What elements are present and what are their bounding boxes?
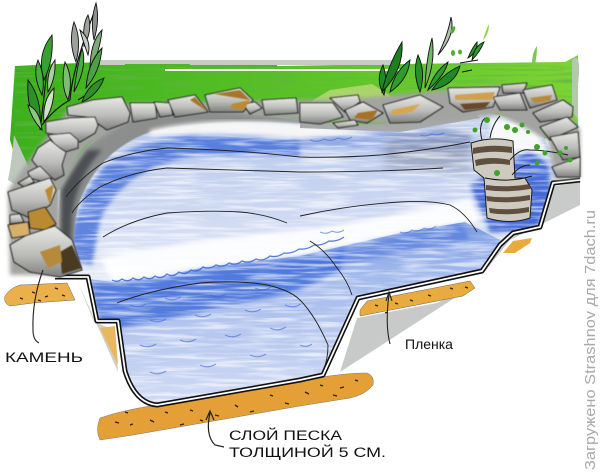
strong blue at left and right corners — [70, 135, 300, 265]
label arrow: sand layer — [206, 411, 224, 447]
ripple marks in deep water — [130, 133, 444, 374]
sand and gravel: upper right — [485, 182, 580, 272]
shoreline grey slope — [59, 110, 300, 245]
deep blue band below the ripple line — [88, 248, 345, 328]
label arrow: stone — [33, 270, 43, 343]
pencil streaks — [74, 122, 556, 402]
label arrow: film — [386, 292, 392, 344]
stone shading — [40, 90, 552, 274]
deep water — [88, 222, 510, 405]
stones — [8, 83, 580, 277]
contour lines — [66, 142, 477, 371]
sand layer: right step — [340, 281, 475, 372]
label: film: Пленка — [405, 336, 453, 352]
loose green leaves, top right — [450, 24, 537, 68]
sand layer: left ledge — [5, 282, 118, 372]
label: stone: КАМЕНЬ — [5, 349, 83, 365]
planter stack of stones — [471, 139, 532, 222]
grass background — [8, 55, 579, 192]
stone backing — [8, 85, 580, 275]
scalloped ripple line — [112, 237, 344, 281]
label: sand layer: ТОЛЩИНОЙ 5 СМ. — [229, 445, 386, 460]
upper shelf water — [59, 110, 556, 282]
reeds, top right — [379, 17, 484, 95]
white shelf edge, upper band of light — [100, 198, 480, 282]
water basin — [50, 105, 560, 410]
label: sand layer — [229, 428, 386, 460]
sand layer: bottom — [98, 373, 373, 440]
pale patch behind the planter — [490, 118, 548, 160]
small plants in planter — [472, 116, 572, 176]
reeds, left — [28, 3, 104, 130]
watermark: Загружено Strashnov для 7dach.ru — [583, 210, 599, 470]
pond liner film — [55, 180, 580, 405]
label: sand layer: СЛОЙ ПЕСКА — [229, 428, 342, 443]
